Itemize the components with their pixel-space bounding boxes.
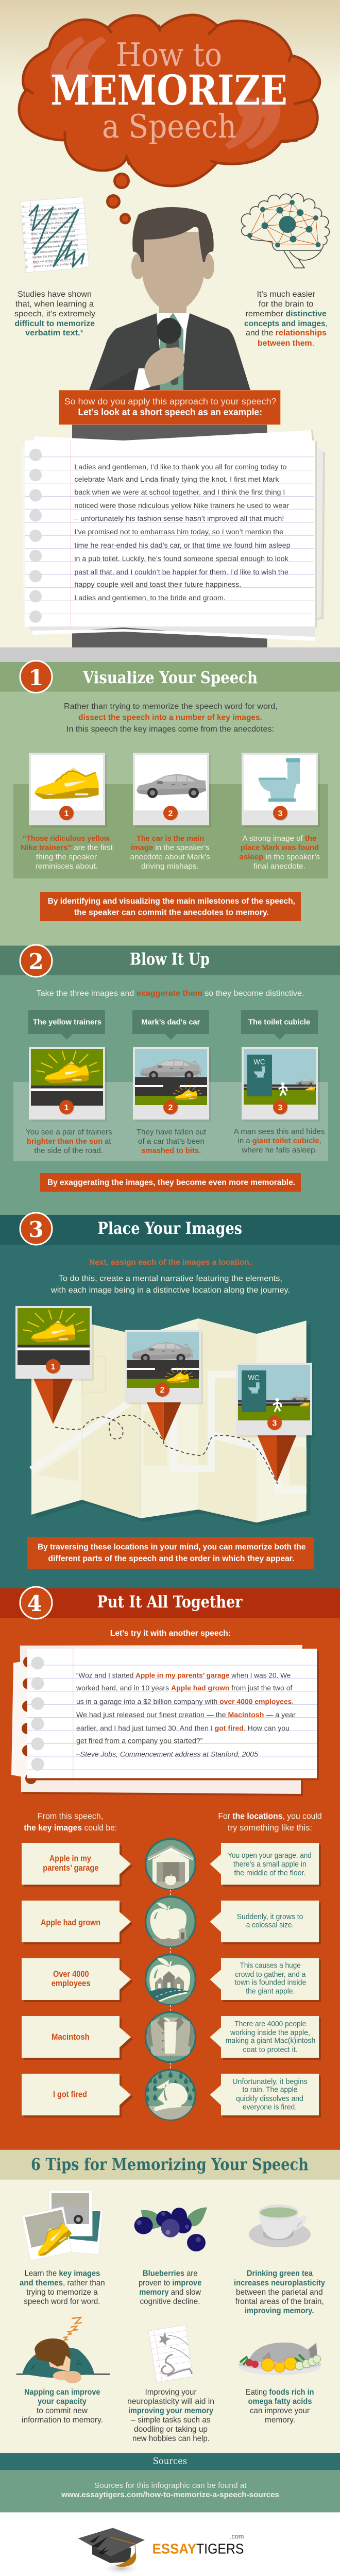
title: MEMORIZE (50, 66, 287, 114)
pin 1: 1 (51, 1363, 56, 1371)
intro text: right column (244, 290, 328, 348)
quote text: –Steve Jobs, Commencement address at Stanford, 2005 (76, 1750, 258, 1758)
intro text: right column: It's much easier (257, 290, 315, 299)
heading: Visualize Your Speech (82, 668, 258, 687)
captions (21, 834, 320, 871)
number badge 3 (20, 1213, 52, 1245)
icon: scribbled paper: school together, and I think the first (30, 225, 74, 231)
tip texts row 2: information to memory. (22, 2416, 103, 2425)
icon: scribbled paper: yellow Nike trainers he used to wear – (31, 234, 78, 241)
number badge 2: 2 (28, 949, 44, 974)
tip texts row 1: speech word for word. (24, 2297, 100, 2306)
speech text: noticed were those ridiculous yellow Nike trainers he used to wear (74, 502, 290, 510)
banner: apply this approach: Let’s look at a short speech as an example: (78, 407, 262, 417)
tip texts row 1: Drinking green tea (247, 2269, 313, 2278)
icon: tea cup (249, 2205, 311, 2247)
intro text: left column (14, 290, 95, 337)
intro text: right column: and the relationships (246, 329, 327, 337)
intro text: Let’s try it with another speech: (110, 1629, 231, 1638)
intro text: right column: concepts and images, (244, 319, 328, 328)
thought bubbles (107, 174, 130, 223)
map (31, 1318, 311, 1526)
intro text: right column: remember distinctive (245, 310, 327, 318)
source text (61, 2481, 279, 2499)
logo: TIGERS (196, 2541, 244, 2557)
icon: scribbled paper: mention the time he rear-ended his (32, 253, 76, 259)
captions: in a giant toilet cubicle, (238, 1137, 321, 1145)
title: a Speech (102, 108, 236, 145)
number badge 1: 1 (28, 665, 44, 690)
callout (40, 1173, 301, 1192)
number badge 1 (20, 660, 52, 692)
callout (27, 1537, 314, 1569)
logo: .com (230, 2533, 244, 2540)
speech text: happy couple well and toast their future happiness. (74, 581, 241, 588)
row 5: fired: to rain. The apple (242, 2086, 297, 2094)
row 4: macintosh: coat to protect it. (243, 2045, 298, 2054)
callout: the speaker can commit the anecdotes to memory. (74, 908, 269, 917)
captions: anecdote about Mark’s (130, 853, 210, 861)
row 5: fired: everyone is fired. (243, 2103, 297, 2112)
captions: where he falls asleep. (241, 1146, 317, 1155)
card: giant toilet cubicle: 3 (278, 1104, 283, 1112)
logo (78, 2528, 244, 2575)
logo: ESSAY (152, 2541, 196, 2557)
captions: final anecdote. (253, 862, 305, 871)
callout (40, 892, 301, 921)
tip texts row 2: – simple tasks such as (131, 2416, 211, 2425)
speech text: Ladies and gentlemen, to the bride and groom. (74, 594, 226, 602)
tip texts row 1: between the parietal and (236, 2288, 323, 2297)
column headers: From this speech, (38, 1812, 103, 1821)
callout: By exaggerating the images, they become even more memorable. (47, 1178, 295, 1187)
section 5: tips (0, 2150, 340, 2453)
speech text: celebrate Mark and Linda finally tying the knot. I first met Mark (74, 476, 279, 483)
captions: the side of the road. (34, 1146, 103, 1155)
card: toilet (242, 753, 320, 827)
heading: Sources (153, 2456, 187, 2467)
captions: image in the speaker’s (131, 843, 210, 852)
tip texts row 1: Blueberries are (143, 2269, 197, 2278)
captions: reminisces about. (36, 862, 98, 871)
section 4: put it all together (0, 1587, 340, 2150)
tip texts row 1: and themes, rather than (20, 2279, 105, 2287)
captions: The car is the main (137, 834, 204, 843)
intro text (64, 702, 278, 734)
intro text: To do this, create a mental narrative featuring the elements, (59, 1275, 282, 1283)
tip texts row 1: increases neuroplasticity (234, 2279, 325, 2287)
card: smashed car: 2 (168, 1104, 173, 1112)
quote text: “Woz and I started Apple in my parents’ garage when I was 20. We (76, 1672, 291, 1680)
row 5: fired (22, 2070, 321, 2122)
column headers: For the locations, you could (218, 1812, 322, 1821)
intro text: Take the three images and exaggerate them so they become distinctive. (37, 989, 304, 998)
row 1: garage: You open your garage, and (228, 1851, 312, 1860)
intro text: right column: for the brain to (259, 300, 313, 309)
card: giant toilet cubicle (242, 1047, 320, 1122)
section 2: blow it up (0, 945, 340, 1215)
row 5: fired: quickly dissolves and (236, 2094, 303, 2103)
captions (26, 1127, 325, 1155)
tip texts row 1: cognitive decline. (140, 2297, 200, 2306)
row 3: employees: employees (52, 1978, 91, 1988)
row 2: apple grown: Apple had grown (41, 1918, 100, 1927)
row 2: apple grown (22, 1897, 321, 1948)
icon: fish plate (239, 2343, 321, 2375)
intro text: left column: Studies have shown (18, 290, 92, 299)
icon: coat (145, 2012, 196, 2062)
column headers (24, 1812, 322, 1833)
row 2: apple grown: Suddenly, it grows to (237, 1912, 303, 1921)
thought cloud (19, 15, 320, 186)
intro text: left column: difficult to memorize (14, 319, 95, 328)
tip texts row 2: neuroplasticity will aid in (127, 2397, 214, 2406)
row 4: macintosh: Macintosh (52, 2032, 90, 2042)
callout: By identifying and visualizing the main milestones of the speech, (48, 897, 295, 906)
icon: brain network (241, 194, 330, 268)
icon: garage with small apple (145, 1839, 196, 1891)
title (50, 36, 287, 145)
row 3: employees: This causes a huge (240, 1961, 301, 1970)
icon: apple dissolving in rain (145, 2070, 196, 2122)
card: bright trainers: 1 (64, 1104, 69, 1112)
title: How to (116, 36, 222, 74)
speech text: back when we were at school together, and I think the first thing I (74, 488, 285, 496)
banner: apply this approach (59, 391, 280, 425)
callout: By traversing these locations in your mind, you can memorize both the (38, 1543, 305, 1552)
row 1: garage: Apple in my (49, 1854, 91, 1863)
pin 2: 2 (160, 1386, 165, 1395)
captions: smashed to bits. (141, 1146, 201, 1155)
source text: Sources for this infographic can be found at (94, 2481, 247, 2490)
icon: scribbled paper: improved all that much! I've promised (32, 244, 78, 250)
row 1: garage: there’s a small apple in (233, 1860, 307, 1869)
icon: giant apple (145, 1897, 196, 1948)
card: car (133, 753, 211, 827)
tip texts row 2: to commit new (37, 2406, 88, 2415)
row 3: employees: town is founded inside (234, 1978, 306, 1987)
speech text: I’ve promised not to embarrass him today, so I won’t mention the (74, 528, 283, 536)
panel: jobs quote notepaper (11, 1645, 319, 1796)
icon: scribbled paper: you all for coming today to celebrate (29, 211, 74, 217)
icon: scribbled paper: dad's car, or that time we found him (32, 258, 77, 264)
captions: “Those ridiculous yellow (23, 834, 110, 843)
card: car: 2 (168, 809, 173, 818)
label: yellow trainers (28, 1010, 105, 1040)
captions: They have fallen out (137, 1128, 207, 1137)
captions: asleep in the speaker’s (240, 853, 320, 861)
number badge 4 (20, 1587, 52, 1619)
row 4: macintosh: working inside the apple, (230, 2028, 310, 2037)
row 3: employees: Over 4000 (53, 1969, 89, 1979)
intro text (50, 1258, 290, 1295)
tip texts row 2: memory. (265, 2416, 295, 2425)
connector dashes (170, 1890, 171, 2069)
icon: scribbled paper: Mark and Linda finally tying the knot. I (30, 216, 77, 222)
tip texts row 2: doodling or taking up (134, 2425, 208, 2434)
tip texts row 1: trying to memorize a (26, 2288, 98, 2297)
tip texts row 2 (22, 2388, 314, 2443)
icon: scribbled paper: not to embarrass him today, so I won't (32, 248, 79, 255)
captions: place Mark was found (241, 843, 319, 852)
icon: town in apple (145, 1955, 196, 2005)
tip texts row 2: Eating foods rich in (246, 2388, 314, 2397)
icon: scribbled paper: asleep in a pub toilet. Luckily, he's (33, 262, 75, 268)
row 5: fired: Unfortunately, it begins (232, 2077, 308, 2086)
speech text (74, 463, 291, 602)
source text: www.essaytigers.com/how-to-memorize-a-speech-sources (61, 2490, 279, 2499)
number badge 4: 4 (27, 1591, 42, 1616)
tip texts row 2: improving your memory (128, 2406, 213, 2415)
intro text: left column: speech, it’s extremely (14, 310, 95, 318)
quote text: We had just released our finest creation — the Macintosh — a year (76, 1711, 296, 1719)
number badge 2 (20, 945, 52, 977)
row 1: garage (22, 1839, 321, 1891)
quote text: earlier, and I had just turned 30. And then I got fired. How can you (76, 1724, 290, 1732)
divider band (0, 647, 340, 662)
quote text: get fired from a company you started?” (76, 1737, 203, 1745)
tip texts row 2: Napping can improve (24, 2388, 100, 2397)
tip texts row 1: improving memory. (245, 2307, 314, 2315)
tip texts row 2: new hobbies can help. (132, 2434, 210, 2443)
card: toilet: 3 (278, 809, 283, 818)
tip texts row 2: omega fatty acids (248, 2397, 312, 2406)
icon: photos (22, 2190, 103, 2261)
sources (0, 2453, 340, 2512)
icon: scribbled paper: first met Mark back when we were at (30, 221, 76, 227)
pin 2 (125, 1330, 203, 1442)
captions: A man sees this and hides (234, 1127, 325, 1136)
card: trainers: 1 (64, 809, 69, 818)
intro text: dissect the speech into a number of key images. (78, 714, 262, 722)
tip texts row 1: proven to improve (139, 2279, 202, 2287)
icon: scribbled paper (21, 197, 89, 273)
captions: Nike trainers” are the first (21, 843, 113, 852)
speech text: Ladies and gentlemen, I’d like to thank you all for coming today to (74, 463, 286, 471)
speech text: in a pub toilet. Luckily, he’s found someone special enough to look (74, 555, 288, 563)
row 4: macintosh: There are 4000 people (234, 2020, 306, 2028)
captions: thing the speaker (36, 853, 97, 861)
row 3: employees (22, 1955, 321, 2005)
tip texts row 1 (20, 2269, 325, 2315)
number badge 3: 3 (28, 1217, 44, 1242)
intro text: Rather than trying to memorize the speech word for word, (64, 702, 278, 711)
card: bright trainers (29, 1047, 107, 1122)
speech text: – unfortunately his fashion sense hasn’t improved all that much! (74, 515, 284, 522)
podium (72, 425, 267, 647)
speech text: time he rear-ended his dad’s car, or that time we found him asleep (74, 541, 291, 549)
row 3: employees: crowd to gather, and a (235, 1970, 306, 1979)
row 3: employees: the giant apple. (246, 1987, 295, 1996)
panel: speech notepaper (22, 430, 325, 641)
row 4: macintosh: making a giant Mac(k)intosh (226, 2037, 315, 2045)
card: trainers (29, 753, 107, 827)
column headers: try something like this: (228, 1823, 312, 1833)
icon: scribbled paper: thing I noticed were those ridiculous (31, 230, 75, 236)
pin 3 (236, 1363, 314, 1482)
icon: doodle paper (148, 2325, 193, 2382)
tip texts row 1: memory and slow (139, 2288, 201, 2297)
label: toilet cubicle (241, 1010, 318, 1040)
pin 1 (15, 1306, 94, 1424)
captions: of a car that’s been (138, 1137, 205, 1146)
intro text: Next, assign each of the images a location. (89, 1258, 251, 1267)
tip texts row 1: frontal areas of the brain, (235, 2297, 324, 2306)
intro text: In this speech the key images come from the anecdotes: (66, 725, 274, 734)
heading: Put It All Together (97, 1592, 243, 1612)
intro text: left column: that, when learning a (15, 300, 94, 309)
quote text: worked hard, and in 10 years Apple had grown from just the two of (76, 1684, 293, 1692)
row 5: fired: I got fired (53, 2090, 87, 2099)
section 3: place your images (0, 1213, 340, 1588)
captions: You see a pair of trainers (26, 1128, 112, 1137)
icon: scribbled paper: Ladies and gentlemen, I'd like to thank (29, 207, 77, 213)
captions: driving mishaps. (141, 862, 199, 871)
row 4: macintosh (22, 2012, 321, 2062)
icon: scribbled paper: unfortunately his fashion sense hasn't (31, 239, 78, 245)
quote text (76, 1672, 296, 1758)
route (55, 1415, 278, 1484)
intro text: with each image being in a distinctive location along the journey. (50, 1286, 290, 1295)
heading: Place Your Images (97, 1218, 242, 1238)
quote text: us in a garage into a $2 billion company with over 4000 employees . (76, 1698, 294, 1706)
banner: apply this approach: So how do you apply this approach to your speech? (64, 396, 277, 406)
tip texts row 2: Improving your (145, 2388, 197, 2397)
label: yellow trainers: The yellow trainers (33, 1018, 101, 1026)
speaker figure (89, 207, 250, 390)
row 2: apple grown: a colossal size. (246, 1921, 294, 1929)
heading: Blow It Up (130, 949, 210, 969)
label: dad's car (132, 1010, 209, 1040)
row 1: garage: the middle of the floor. (234, 1869, 305, 1877)
intro text: right column: between them. (258, 339, 314, 348)
top background (0, 0, 340, 648)
intro text: left column: verbatim text. * (25, 329, 83, 337)
label: dad's car: Mark’s dad’s car (141, 1018, 200, 1026)
tip texts row 1: Learn the key images (25, 2269, 100, 2278)
callout: different parts of the speech and the order in which they appear. (48, 1554, 294, 1563)
icon: nap (16, 2317, 110, 2383)
icon: blueberries (134, 2207, 207, 2251)
tip texts row 2: can improve your (250, 2406, 310, 2415)
column headers: the key images could be: (24, 1823, 117, 1833)
row 1: garage: parents’ garage (43, 1863, 99, 1873)
section 1: visualize your speech (0, 660, 340, 946)
label: toilet cubicle: The toilet cubicle (248, 1018, 310, 1026)
pin 3: 3 (273, 1419, 277, 1428)
speech text: past all that, and I couldn’t be happier for them. I’d like to wish the (74, 568, 288, 576)
card: smashed car (133, 1047, 211, 1122)
captions: brighter than the sun at (27, 1137, 111, 1146)
captions: A strong image of the (242, 834, 316, 843)
tip texts row 2: your capacity (38, 2397, 87, 2406)
